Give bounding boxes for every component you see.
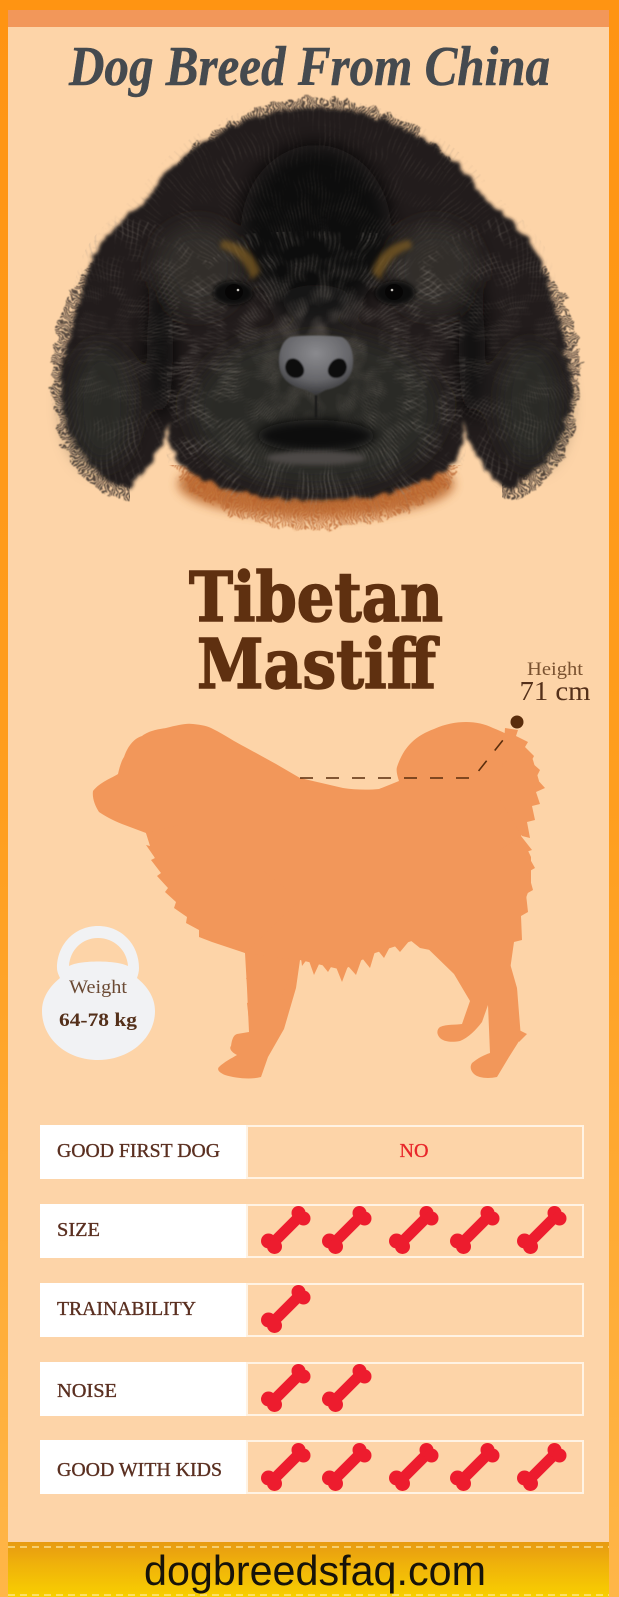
right brow xyxy=(372,240,412,280)
left ear fur spikes xyxy=(48,261,130,502)
footer band: dogbreedsfaq.com xyxy=(144,1547,486,1594)
crown fur spikes xyxy=(177,94,452,166)
shading xyxy=(70,145,562,488)
head and ears base xyxy=(60,108,572,500)
row: good first dog xyxy=(40,1125,583,1179)
row: size xyxy=(40,1204,583,1258)
breed name: Mastiff xyxy=(197,625,440,705)
row: good with kids xyxy=(40,1440,583,1494)
height marker xyxy=(300,716,524,778)
weight label: Weight xyxy=(69,977,128,998)
title: Dog Breed From China xyxy=(68,36,550,98)
row: good first dog: GOOD FIRST DOG xyxy=(57,1140,220,1162)
row: good with kids: GOOD WITH KIDS xyxy=(57,1459,222,1481)
height label: 71 cm xyxy=(520,676,590,706)
right ear fur spikes xyxy=(502,265,585,500)
nose xyxy=(279,336,353,395)
row: noise xyxy=(40,1362,583,1416)
height label xyxy=(520,659,590,706)
weight kettlebell xyxy=(42,926,155,1060)
footer band xyxy=(8,1542,609,1597)
muzzle strands xyxy=(231,285,401,455)
left brow xyxy=(220,240,260,280)
dog silhouette xyxy=(93,722,545,1078)
row: size: SIZE xyxy=(57,1219,100,1241)
height label: Height xyxy=(527,659,584,680)
row: trainability xyxy=(40,1283,583,1337)
breed name: Tibetan xyxy=(189,558,443,638)
row: trainability: TRAINABILITY xyxy=(57,1298,196,1320)
row: noise: NOISE xyxy=(57,1380,117,1402)
illustration: dog face xyxy=(35,108,597,518)
mouth xyxy=(258,395,374,465)
row: good first dog: NO xyxy=(400,1140,428,1162)
fur strands xyxy=(35,215,597,455)
left eye xyxy=(213,281,253,305)
top strip xyxy=(8,10,609,27)
chin fringe xyxy=(169,465,462,532)
breed name xyxy=(189,558,443,705)
weight value: 64-78 kg xyxy=(59,1010,138,1031)
right eye xyxy=(375,281,415,305)
